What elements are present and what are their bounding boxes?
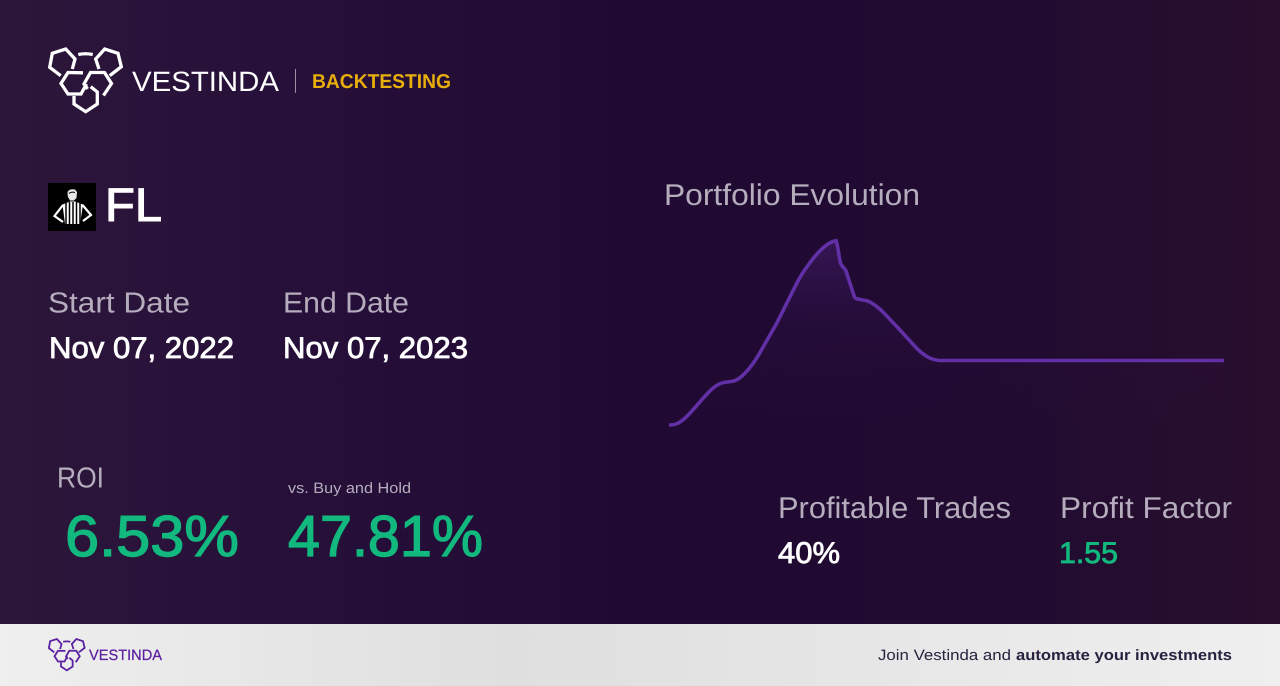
area fill: [669, 241, 1224, 425]
icon: Vestinda hexagon logo: [50, 49, 121, 112]
profit factor value: 1.55: [1059, 537, 1118, 570]
backtesting label: BACKTESTING: [312, 71, 451, 93]
ROI label: ROI: [57, 462, 104, 494]
chart title: Portfolio Evolution: [664, 179, 920, 212]
profitable trades value: 40%: [778, 537, 840, 570]
header divider: [295, 69, 296, 93]
footer call to action: [878, 647, 1232, 664]
profitable trades label: Profitable Trades: [778, 492, 1011, 525]
footer bar: [0, 624, 1280, 686]
buy and hold value: 47.81%: [288, 504, 483, 569]
footer call to action: Join Vestinda and: [878, 647, 1011, 664]
start date value: Nov 07, 2022: [49, 332, 234, 365]
buy and hold metric: [288, 480, 483, 569]
portfolio line: [669, 241, 1224, 425]
profit factor metric: [1059, 492, 1232, 570]
header logo: [50, 49, 451, 112]
ROI value: 6.53%: [65, 504, 239, 569]
profitable trades metric: [778, 492, 1011, 570]
ticker symbol: FL: [105, 178, 162, 231]
icon: referee logo: [48, 183, 96, 231]
end date: [283, 288, 468, 365]
end date label: End Date: [283, 288, 409, 320]
ticker: [48, 178, 162, 231]
icon: footer logo: [49, 639, 85, 670]
start date label: Start Date: [48, 288, 190, 320]
buy and hold label: vs. Buy and Hold: [288, 480, 411, 497]
end date value: Nov 07, 2023: [283, 332, 468, 365]
logo wordmark: VESTINDA: [132, 66, 279, 97]
ROI metric: [57, 462, 239, 569]
footer call to action: automate your investments: [1016, 647, 1232, 664]
start date: [48, 288, 234, 365]
footer wordmark: VESTINDA: [89, 647, 162, 664]
portfolio evolution chart: [664, 179, 1224, 425]
profit factor label: Profit Factor: [1060, 492, 1232, 525]
